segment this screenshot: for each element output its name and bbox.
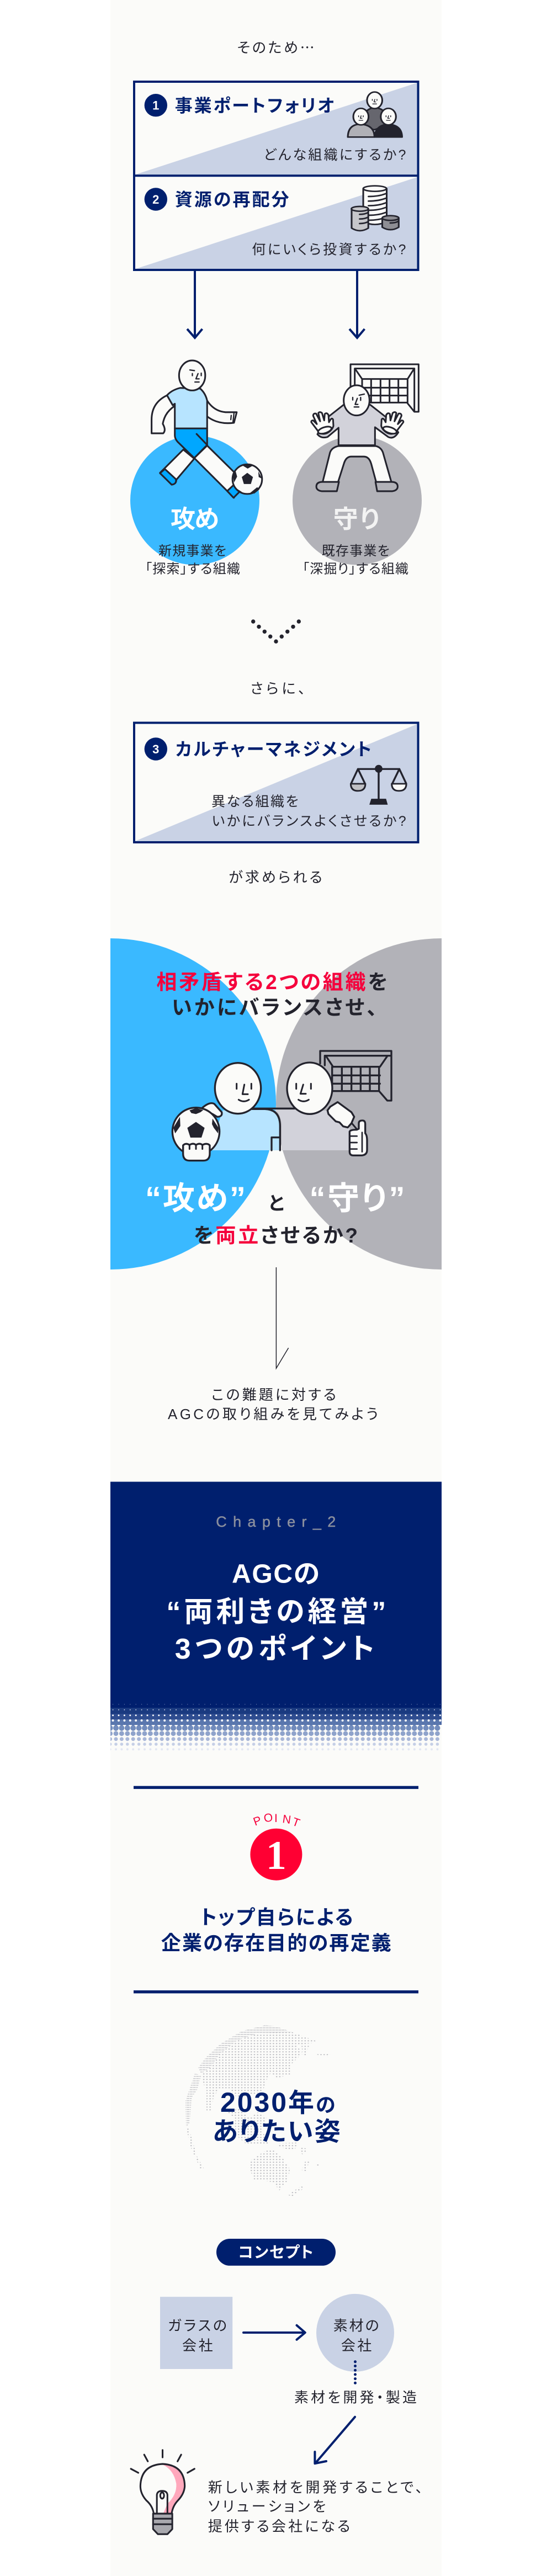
panel: portfolio and resources box [134, 82, 418, 270]
arrow: to offense [187, 271, 202, 338]
heading: 事業ポートフォリオ: 事業ポートフォリオ [175, 95, 335, 115]
text: どんな組織にするか: どんな組織にするか? [263, 147, 406, 163]
heading: ありたい姿: ありたい姿 [213, 2117, 341, 2146]
heading: 攻め: 攻め [171, 505, 219, 533]
text: 新しい素材を開発することで: ソリューションを [208, 2498, 326, 2515]
text: さらに: さらに、 [250, 680, 305, 697]
heading: 相矛盾する2つの組織を: 相矛盾する2つの組織を [156, 971, 388, 994]
semicircle: defense [276, 938, 442, 1270]
text: 既存事業を「深掘り」する組織: 既存事業を [322, 544, 390, 559]
box outline [134, 723, 418, 842]
panel 1 diagonal [136, 83, 417, 174]
bottom rule [134, 1990, 418, 1993]
circle: materials company: 素材の [333, 2317, 379, 2334]
arrow: right [243, 2325, 305, 2340]
number badge 3: 3 [152, 742, 159, 756]
heading: 守り: 守り [333, 505, 380, 533]
label: “攻め”: “攻め” [145, 1181, 246, 1217]
text: この難題に対する AGCの取り組みを見てみよう [168, 1387, 378, 1422]
panel: defense [293, 364, 422, 577]
panel: 2030 vision globe [185, 2025, 341, 2196]
label: Chapter_2: Chapter_2 [216, 1513, 336, 1530]
box outline [134, 82, 418, 270]
text: 何にいくら投資するか: 何にいくら投資するか? [252, 242, 406, 258]
heading: AGCの両利きの経営 3つのポイント: 3つのポイント [175, 1633, 374, 1665]
panel: chapter 2 banner [110, 1481, 442, 1749]
text: 新規事業を「探索」する組織: 新規事業を [158, 544, 226, 559]
goal and upper body [311, 364, 418, 445]
text: 新しい素材を開発することで [208, 2479, 423, 2535]
text: 素材を開発・製造: 素材を開発・製造 [294, 2389, 417, 2405]
icon: coin stacks [352, 186, 399, 231]
text: 異なる組織をいかにバランスよくさせるか: いかにバランスよくさせるか? [212, 814, 406, 829]
arrow: to defense [349, 271, 364, 338]
box divider [134, 174, 418, 177]
top rule [134, 1786, 418, 1789]
heading: AGCの両利きの経営 3つのポイント: AGCの [232, 1560, 320, 1589]
diagram: glass company to materials company [131, 2294, 423, 2535]
heading: トップ自らによる 企業の存在目的の再定義 [161, 1906, 391, 1954]
arrow: thin line down [276, 1267, 289, 1368]
heading: いかにバランスさせ: いかにバランスさせ、 [172, 996, 377, 1019]
circle: defense [293, 435, 422, 565]
number badge 1: 1 [152, 99, 159, 113]
label: “守り”: “守り” [309, 1181, 405, 1217]
heading: AGCの両利きの経営 3つのポイント [166, 1560, 386, 1665]
panel: offense [130, 360, 262, 577]
number badge 2 [145, 188, 167, 211]
panel: culture management box [134, 723, 418, 842]
illustration: goalkeeper [311, 364, 418, 491]
dotted connector [354, 2362, 357, 2383]
text: この難題に対する AGCの取り組みを見てみよう: この難題に対する [211, 1387, 336, 1403]
icon: people [348, 92, 402, 137]
panel: point 1 heading [134, 1786, 418, 1993]
label: と: と [268, 1193, 284, 1214]
text: 既存事業を「深掘り」する組織: 「深掘り」する組織 [302, 562, 408, 577]
circle: materials company: 会社 [341, 2337, 371, 2354]
box diagonal [134, 724, 418, 842]
text: 新規事業を「探索」する組織 [145, 544, 240, 577]
text: 新しい素材を開発することで: 新しい素材を開発することで、 [208, 2479, 423, 2495]
icon: dotted globe [185, 2025, 330, 2196]
illustration: striker [152, 360, 262, 498]
icon: dotted chevron [251, 619, 301, 644]
heading: 2030年の: 2030年の [220, 2087, 336, 2118]
number badge 1 [145, 94, 167, 116]
text: この難題に対する AGCの取り組みを見てみよう: AGCの取り組みを見てみよう [168, 1406, 378, 1422]
label: POINT arc: POINT [252, 1811, 301, 1830]
circle: materials company [316, 2294, 394, 2372]
halftone fade [110, 1704, 442, 1749]
illustration: two players shoulder to shoulder [172, 1051, 391, 1161]
text: 異なる組織をいかにバランスよくさせるか: 異なる組織を [211, 794, 299, 809]
panel: balance offense and defense [110, 938, 442, 1270]
text: 異なる組織をいかにバランスよくさせるか [211, 794, 406, 829]
text: intro そのため: そのため… [237, 36, 315, 57]
box: glass company [160, 2297, 232, 2369]
label: concept pill [216, 2239, 336, 2266]
heading: トップ自らによる 企業の存在目的の再定義: 企業の存在目的の再定義 [161, 1932, 391, 1954]
text: 新しい素材を開発することで: 提供する会社になる [208, 2518, 350, 2535]
arrow: diagonal down-left [315, 2417, 355, 2463]
panel 2 diagonal [136, 177, 417, 269]
heading: AGCの両利きの経営 3つのポイント: “両利きの経営” [166, 1596, 386, 1628]
badge: red circle 1 [250, 1829, 302, 1881]
heading: 資源の再配分: 資源の再配分 [175, 190, 289, 210]
box: glass company: 会社 [182, 2337, 213, 2354]
text: 既存事業を「深掘り」する組織 [302, 544, 408, 577]
text: 新規事業を「探索」する組織: 「探索」する組織 [145, 562, 240, 577]
heading: カルチャーマネジメント: カルチャーマネジメント [176, 740, 371, 759]
icon: light bulb [131, 2450, 194, 2534]
semicircle: offense [110, 938, 276, 1270]
heading: を両立させるか: を両立させるか? [194, 1224, 358, 1247]
box: glass company: ガラスの [168, 2317, 227, 2334]
badge: red circle 1: 1 [266, 1833, 286, 1878]
text: が求められる: が求められる [229, 869, 322, 885]
circle: offense [130, 435, 259, 565]
legs and boots [316, 446, 397, 491]
heading: トップ自らによる 企業の存在目的の再定義: トップ自らによる [200, 1906, 353, 1929]
number badge 2: 2 [152, 193, 159, 206]
icon: balance scale [351, 765, 406, 805]
label: concept pill: コンセプト [238, 2244, 314, 2261]
banner background [110, 1481, 442, 1708]
number badge 3 [145, 737, 167, 761]
